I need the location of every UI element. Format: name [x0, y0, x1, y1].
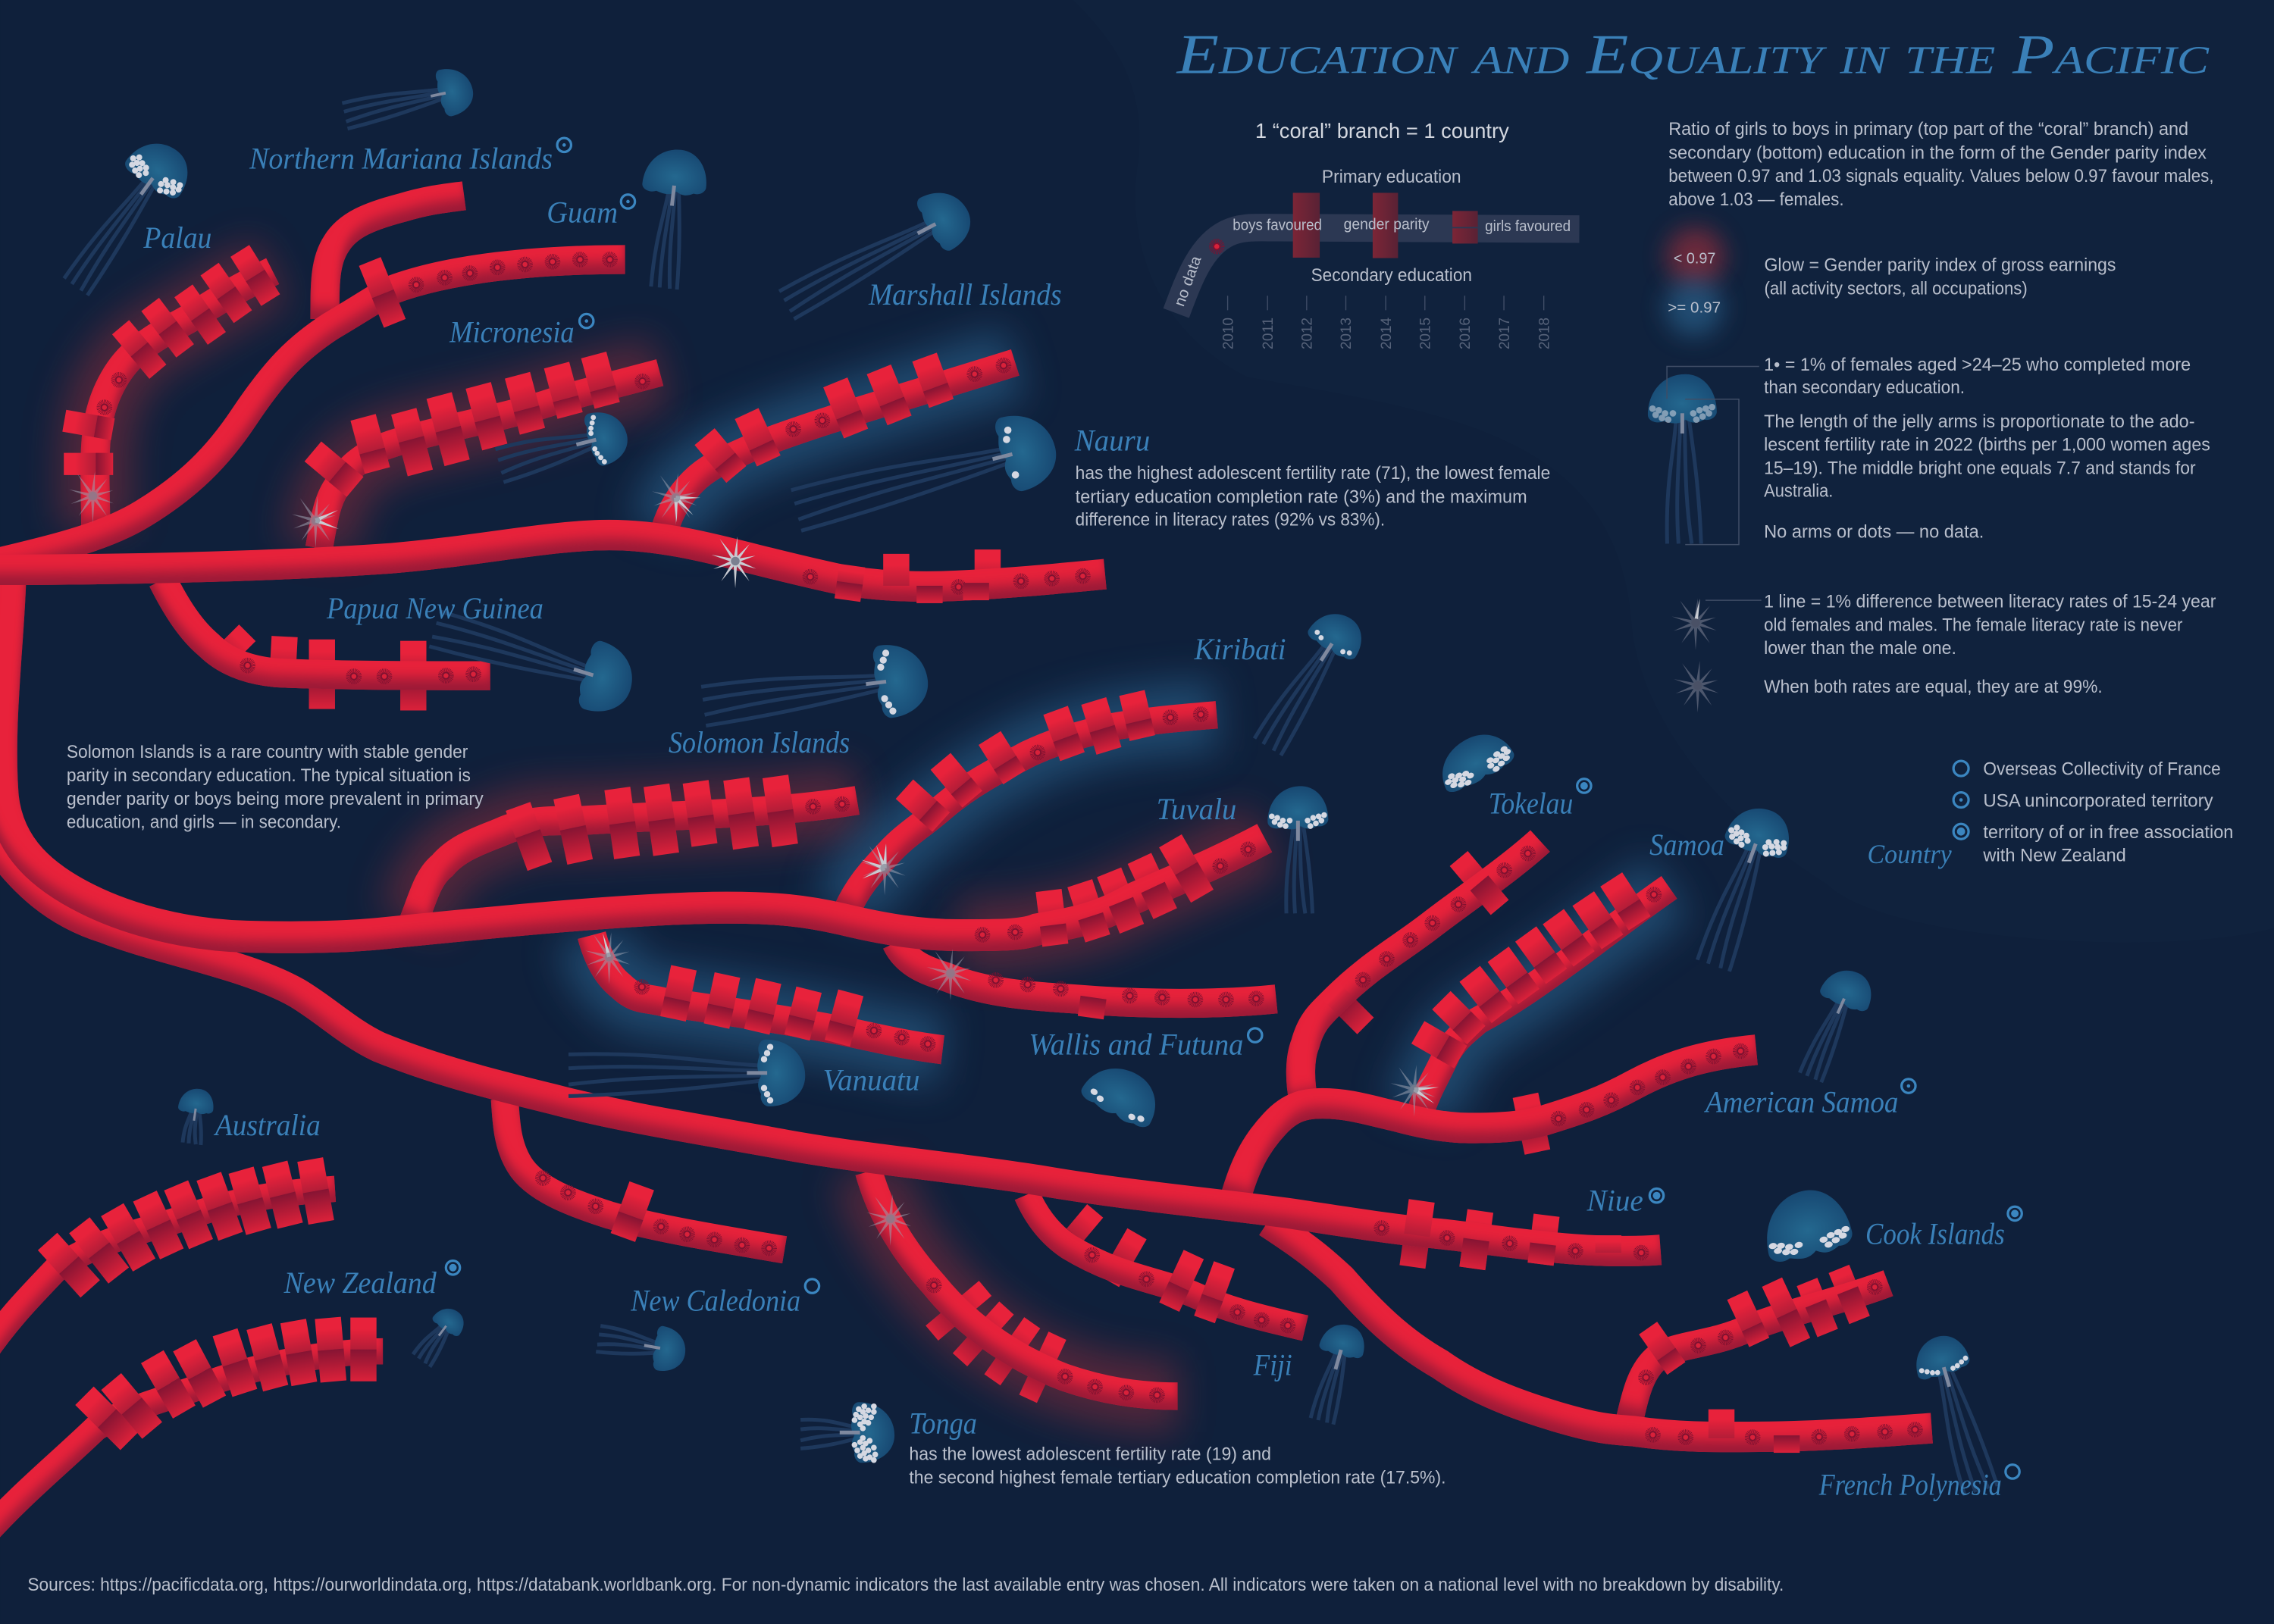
legend text: gender parity ratio: secondary (bottom) education in the form of the Gender parity index — [1668, 143, 2207, 164]
country labels: Samoa — [1649, 828, 1724, 862]
jellyfish: Kiribati — [1243, 602, 1371, 761]
tabs front: Niue — [1404, 1199, 1621, 1270]
legend text: glow — [1764, 255, 2116, 299]
legend: year axis: 2018 — [1536, 318, 1552, 349]
country labels: Palau — [143, 221, 211, 255]
data markers: Tokelau — [1357, 847, 1533, 986]
annotation: Nauru — [1076, 463, 1550, 530]
annotation: Solomon Islands: gender parity or boys being more prevalent in primary — [67, 789, 484, 809]
country labels: Tuvalu — [1157, 792, 1236, 826]
tab: New Caledonia — [611, 1181, 654, 1242]
country labels: Cook Islands — [1865, 1217, 2005, 1251]
data markers: Vanuatu — [636, 981, 934, 1050]
data markers: Papua New Guinea — [242, 660, 479, 682]
legend text: glow: (all activity sectors, all occupations) — [1764, 278, 2028, 299]
annotation: Nauru: has the highest adolescent fertility rate (71), the lowest female — [1076, 463, 1550, 483]
data markers: Niue — [1376, 1222, 1647, 1259]
legend text: gender parity ratio — [1668, 119, 2214, 210]
legend: year axis: 2011 — [1261, 318, 1276, 349]
annotation: Solomon Islands — [67, 742, 484, 832]
tabs front: Tuvalu — [1040, 834, 1214, 947]
legend: year axis: 2015 — [1417, 318, 1433, 349]
territory status markers — [446, 138, 2022, 1478]
sources footnote: Sources: https://pacificdata.org, https://ourworldindata.org, https://databank.worldbank.org. For non-dynamic indicators the last available entry was chosen. All indicators were taken on a national level with no breakdown by disability. — [27, 1575, 1784, 1595]
legend: how to read a coral branch: gender parity — [1344, 216, 1430, 233]
jellyfish: Australia — [174, 1086, 216, 1146]
branch: American Samoa — [1236, 1045, 1756, 1197]
legend: how to read a coral branch: no data — [1171, 253, 1205, 308]
jellyfish: Tokelau — [1430, 724, 1518, 796]
legend text: jellyfish — [1764, 355, 2210, 542]
legend: glow swatches — [1665, 227, 1724, 336]
country labels: Vanuatu — [823, 1062, 919, 1097]
annotation: Tonga: the second highest female tertiary education completion rate (17.5%). — [909, 1467, 1446, 1488]
jellyfish: New Caledonia — [594, 1316, 689, 1375]
legend: literacy star with equal rates — [1674, 661, 1719, 712]
jellyfish: New Zealand — [408, 1302, 470, 1369]
legend text: jellyfish: No arms or dots — no data. — [1764, 521, 1984, 542]
annotation: Solomon Islands: parity in secondary education. The typical situation is — [67, 765, 471, 786]
country labels: Wallis and Futuna — [1029, 1028, 1243, 1062]
annotation: Nauru: tertiary education completion rate (3%) and the maximum — [1076, 487, 1527, 508]
data marker: Micronesia — [637, 376, 648, 387]
legend: year axis: 2013 — [1339, 318, 1355, 349]
data markers: American Samoa — [1552, 1045, 1746, 1125]
country labels: Solomon Islands — [669, 725, 850, 759]
annotation: Tonga — [909, 1444, 1446, 1488]
branch: New Zealand — [0, 1317, 383, 1537]
data markers: Palau — [99, 374, 125, 413]
legend: year axis: 2014 — [1379, 318, 1395, 349]
tabs behind: Tuvalu — [1035, 853, 1165, 927]
branch: Palau — [62, 245, 280, 529]
legend: how to read a coral branch: girls favoured — [1485, 218, 1571, 235]
jellyfish: American Samoa — [1786, 962, 1879, 1087]
tabs behind: Fiji — [1052, 1204, 1147, 1287]
data markers: Wallis and Futuna — [990, 975, 1262, 1006]
legend: country status key: with New Zealand — [1982, 845, 2126, 865]
country labels — [143, 142, 2005, 1502]
branch: Fiji — [1027, 1195, 1305, 1331]
country labels: New Caledonia — [630, 1284, 800, 1318]
country labels: Tonga — [909, 1406, 977, 1440]
legend: country status key: Country — [1868, 839, 1952, 869]
tab: Wallis and Futuna — [1078, 996, 1107, 1019]
country labels: Guam — [547, 195, 618, 229]
tabs front: Tokelau — [1322, 875, 1508, 1012]
legend: how to read a coral branch — [1171, 167, 1580, 313]
legend: jellyfish key — [1648, 366, 1759, 545]
branch: Papua New Guinea — [162, 580, 490, 710]
jellyfish: Wallis and Futuna — [1078, 1054, 1168, 1134]
literacy star: Wallis and Futuna — [926, 949, 972, 1000]
tabs front: Fiji — [1159, 1250, 1235, 1323]
annotation: Nauru: difference in literacy rates (92% vs 83%). — [1076, 510, 1385, 530]
legend text: literacy: lower than the male one. — [1764, 638, 1956, 659]
branch: Micronesia — [305, 352, 660, 548]
jellyfish: Northern Mariana Islands — [340, 64, 478, 138]
data markers: Nauru — [804, 570, 1088, 593]
literacy star: Kiribati — [860, 843, 907, 895]
data markers: Kiribati — [1032, 709, 1207, 759]
legend: year axis: 2017 — [1497, 318, 1513, 349]
data markers: Guam — [410, 254, 615, 290]
tabs behind: Cook Islands — [1796, 1265, 1858, 1308]
legend text: jellyfish: The length of the jelly arms is proportionate to the ado- — [1764, 411, 2195, 432]
tabs: Micronesia — [305, 352, 620, 497]
data markers: Fiji — [1086, 1249, 1294, 1331]
tabs: Kiribati — [896, 690, 1155, 832]
title: Education and Equality in the Pacific — [1176, 24, 2210, 86]
branch: Cook Islands — [1630, 1265, 1888, 1418]
legend: leader line to literacy note — [1706, 599, 1762, 601]
jellyfish: Guam — [631, 146, 710, 292]
tabs front: Nauru — [835, 554, 989, 603]
branch: Solomon Islands — [413, 774, 857, 922]
legend: glow swatches: < 0.97 — [1674, 250, 1715, 267]
literacy star: Samoa — [1390, 1065, 1439, 1116]
data markers: Tuvalu — [976, 843, 1254, 940]
tabs: New Zealand — [75, 1317, 377, 1450]
data markers: Solomon Islands — [807, 798, 847, 812]
legend text: gender parity ratio: between 0.97 and 1.03 signals equality. Values below 0.97 favour males, — [1668, 166, 2214, 186]
country labels: Australia — [213, 1108, 321, 1142]
jellyfish: Palau — [49, 130, 200, 305]
legend text: gender parity ratio: Ratio of girls to boys in primary (top part of the “coral” branch) and — [1668, 119, 2188, 139]
tabs: Samoa — [1411, 872, 1651, 1069]
glow: gender parity of earnings below 0.97 — [95, 271, 1264, 1396]
country labels: American Samoa — [1703, 1084, 1898, 1119]
tabs front: Cook Islands — [1639, 1278, 1870, 1375]
legend text: jellyfish: lescent fertility rate in 2022 (births per 1,000 women ages — [1764, 435, 2210, 455]
jellyfish: French Polynesia — [1909, 1330, 2006, 1499]
branch: Tuvalu main trunk — [2, 580, 1264, 947]
legend: year axis — [1220, 296, 1552, 349]
legend: how to read a coral branch: Primary education — [1322, 167, 1461, 187]
tabs: Vanuatu — [660, 965, 863, 1047]
jellyfish: Cook Islands — [1757, 1183, 1856, 1266]
glow: gender parity of earnings at or above 0.97 — [592, 362, 1669, 1113]
data marker: Samoa — [1648, 889, 1660, 900]
legend: year axis: 2012 — [1300, 318, 1316, 349]
branch: Northern Mariana Islands — [325, 196, 464, 319]
branch: Guam — [0, 254, 625, 565]
legend: how to read a coral branch: boys favoured — [1233, 217, 1322, 233]
tabs behind: Papua New Guinea — [217, 624, 427, 710]
legend text: jellyfish: than secondary education. — [1764, 377, 1965, 398]
data markers: French Polynesia — [1647, 1424, 1921, 1443]
tabs: Tonga — [926, 1281, 1067, 1403]
tabs behind: Niue — [1399, 1209, 1559, 1270]
legend text: jellyfish: Australia. — [1764, 481, 1833, 502]
jellyfish: Nauru — [786, 407, 1063, 546]
branch: Marshall Islands — [664, 352, 1015, 530]
country labels: French Polynesia — [1818, 1468, 2002, 1502]
data markers: Tonga — [928, 1279, 1163, 1401]
branch: Tonga — [869, 1172, 1178, 1403]
tabs behind: Nauru — [975, 549, 1001, 581]
branch: French Polynesia — [1267, 1222, 1931, 1453]
legend: country status key — [1868, 759, 2233, 869]
legend backdrop panel — [1073, 0, 2274, 943]
annotation: Solomon Islands: Solomon Islands is a rare country with stable gender — [67, 742, 468, 762]
legend: how to read a coral branch: Secondary education — [1311, 265, 1472, 286]
jellyfish: Fiji — [1299, 1319, 1370, 1427]
branch: Vanuatu — [592, 935, 943, 1050]
country labels: Nauru — [1074, 423, 1150, 457]
legend heading: 1 “coral” branch = 1 country — [1255, 119, 1509, 142]
country labels: Northern Mariana Islands — [249, 142, 553, 176]
country labels: Fiji — [1253, 1348, 1292, 1382]
literacy star: Vanuatu — [584, 932, 631, 984]
branch: Australia — [0, 1157, 335, 1356]
legend: country status key: USA unincorporated territory — [1983, 790, 2213, 811]
legend text: literacy: When both rates are equal, they are at 99%. — [1764, 677, 2103, 697]
country labels: New Zealand — [283, 1266, 437, 1300]
tabs: Marshall Islands — [694, 352, 954, 483]
legend text: gender parity ratio: above 1.03 — females. — [1668, 189, 1844, 210]
tabs: Australia — [38, 1157, 334, 1297]
branch: Nauru — [0, 535, 1105, 603]
tabs: Palau — [62, 245, 280, 475]
branch: Wallis and Futuna — [896, 943, 1276, 1019]
branch: Samoa — [1411, 872, 1669, 1113]
legend text: glow: Glow = Gender parity index of gross earnings — [1764, 255, 2116, 275]
country labels: Kiribati — [1194, 632, 1286, 666]
jellyfish: Marshall Islands — [772, 181, 980, 330]
legend text: jellyfish: 15–19). The middle bright one equals 7.7 and stands for — [1764, 458, 2196, 479]
tabs: French Polynesia — [1709, 1410, 1799, 1453]
branch: Tokelau — [1301, 841, 1540, 1102]
legend text: literacy: 1 line = 1% difference between literacy rates of 15-24 year — [1764, 591, 2216, 612]
jellyfish: Vanuatu — [568, 1040, 805, 1106]
tabs behind: Tokelau — [1335, 851, 1488, 1034]
legend: year axis: 2016 — [1458, 318, 1474, 349]
legend text: literacy — [1764, 591, 2216, 697]
tabs: Solomon Islands — [506, 774, 798, 871]
jellyfish: Samoa — [1682, 799, 1798, 976]
data markers: Marshall Islands — [788, 359, 1010, 435]
legend: glow swatches: >= 0.97 — [1668, 299, 1721, 316]
tab: Guam — [359, 257, 406, 327]
legend: year axis: 2010 — [1220, 318, 1236, 349]
legend text: literacy: old females and males. The female literacy rate is never — [1764, 615, 2182, 635]
branch: New Caledonia — [505, 1099, 785, 1254]
annotation: Solomon Islands: education, and girls — in secondary. — [67, 812, 341, 832]
literacy star: Nauru — [711, 537, 756, 588]
legend: literacy star with one bright line — [1671, 598, 1717, 650]
jellyfish: Micronesia — [493, 406, 633, 490]
annotation: Tonga: has the lowest adolescent fertility rate (19) and — [909, 1444, 1271, 1465]
country labels: Tokelau — [1489, 786, 1573, 820]
literacy star: Tonga — [866, 1194, 912, 1246]
country labels: Marshall Islands — [868, 277, 1062, 311]
data markers: Cook Islands — [1640, 1281, 1881, 1383]
legend: country status key: territory of or in free association — [1983, 822, 2233, 843]
country labels: Papua New Guinea — [326, 591, 543, 625]
jellyfish: Tonga — [800, 1402, 894, 1463]
branch: Niue main trunk — [0, 834, 1661, 1270]
literacy star: Marshall Islands — [651, 473, 700, 525]
legend: country status key: Overseas Collectivity of France — [1983, 759, 2221, 780]
branch: Kiribati — [847, 690, 1217, 911]
data markers: New Caledonia — [537, 1172, 775, 1254]
country labels: Niue — [1586, 1183, 1643, 1217]
literacy star: Palau — [68, 471, 114, 523]
literacy star: Micronesia — [291, 496, 340, 548]
jellyfish: Papua New Guinea — [424, 593, 641, 721]
jellyfish: Solomon Islands — [699, 640, 932, 740]
country labels: Micronesia — [449, 315, 575, 349]
legend text: jellyfish: 1• = 1% of females aged >24–25 who completed more — [1764, 355, 2191, 375]
jellyfish: Tuvalu — [1267, 786, 1328, 913]
